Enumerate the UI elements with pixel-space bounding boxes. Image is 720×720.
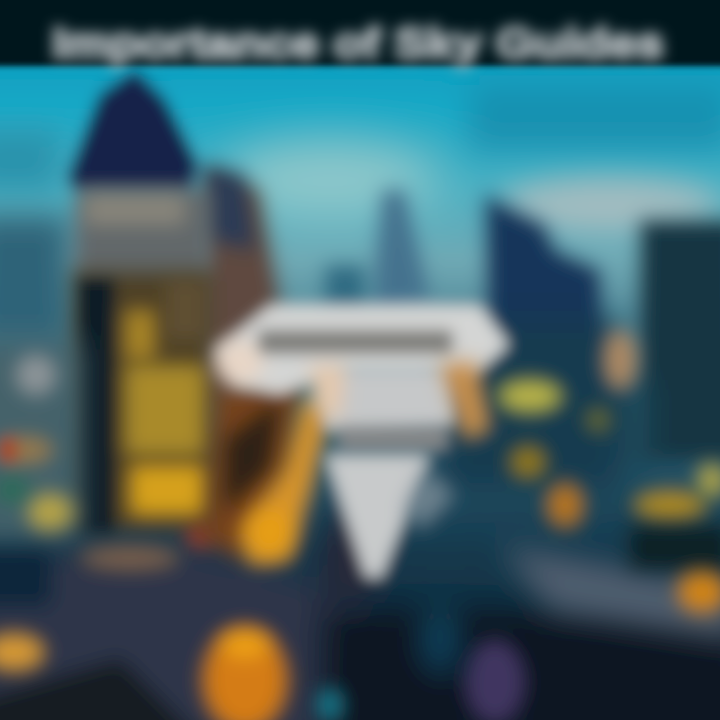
banner label: [258, 330, 453, 354]
lower street and bokeh lights: [0, 330, 720, 720]
title bar: [0, 0, 720, 68]
orange diagonal light and brown shadow: [205, 380, 380, 610]
main tower: [68, 70, 280, 533]
central white location pin with banner: [215, 305, 510, 578]
distant skyline and towers: [0, 190, 720, 490]
title: Importance of Sky Guides: [52, 19, 664, 68]
